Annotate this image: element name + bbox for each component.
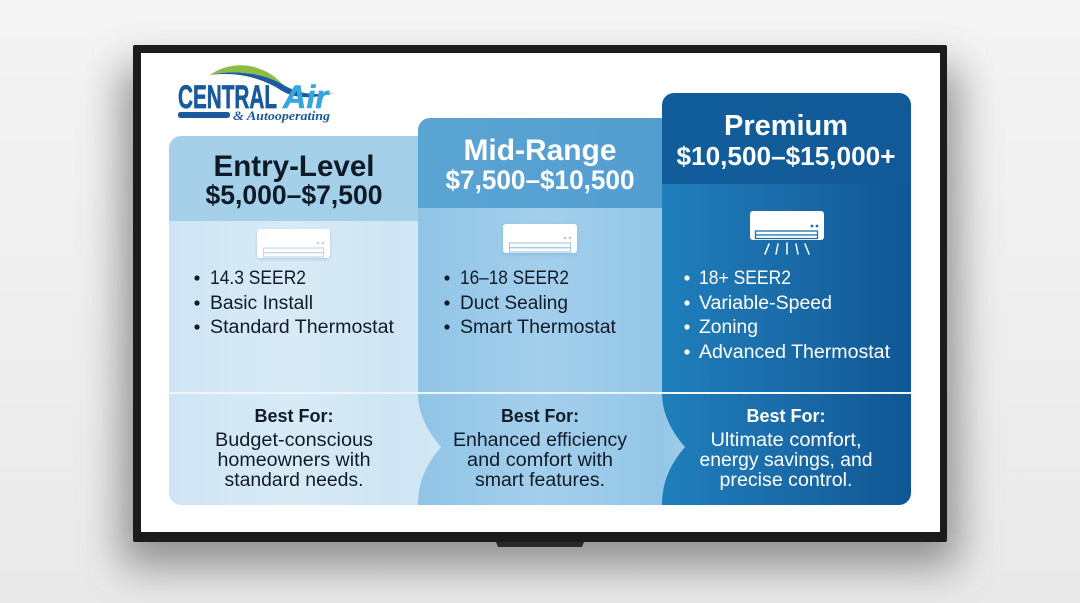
logo bar — [178, 112, 230, 118]
mid best for — [453, 406, 628, 491]
mid body — [418, 208, 690, 505]
premium title: Premium — [724, 110, 848, 142]
mid best for: Best For: — [501, 406, 579, 426]
icon: air conditioner — [257, 229, 330, 258]
logo: Central Air — [178, 65, 334, 123]
mid title: Mid-Range — [464, 134, 616, 167]
entry feature list: 14.3 SEER2 — [210, 268, 306, 289]
panel: premium — [662, 93, 911, 505]
panel: mid-range — [418, 118, 690, 505]
premium feature list: Zoning — [699, 317, 758, 338]
screen — [141, 53, 940, 532]
entry title: Entry-Level — [214, 150, 374, 183]
premium body — [662, 184, 911, 505]
premium best for: Ultimate comfort, — [710, 430, 862, 451]
logo tagline: & Autooperating — [233, 108, 331, 123]
mid price: $7,500–$10,500 — [446, 165, 634, 195]
entry best for: Best For: — [254, 406, 334, 426]
divider line — [169, 392, 911, 394]
premium feature list: 18+ SEER2 — [699, 268, 791, 289]
premium feature list: Variable-Speed — [699, 293, 832, 314]
panel: entry-level — [169, 136, 445, 505]
logo word Air: Air — [282, 79, 330, 115]
entry price: $5,000–$7,500 — [206, 180, 382, 210]
mid feature list: Duct Sealing — [460, 293, 568, 314]
mid best for: smart features. — [475, 470, 605, 491]
wall mount foot — [496, 542, 584, 547]
mid header — [418, 118, 664, 208]
mid feature list: Smart Thermostat — [460, 317, 617, 338]
premium best for: energy savings, and — [700, 450, 872, 471]
premium best for: precise control. — [720, 470, 852, 491]
television — [133, 45, 947, 547]
entry best for: standard needs. — [224, 470, 364, 491]
premium feature list: Advanced Thermostat — [699, 342, 891, 363]
icon: air conditioner with airflow — [750, 211, 824, 254]
mid feature list: 16–18 SEER2 — [460, 268, 569, 289]
premium best for: Best For: — [746, 406, 826, 426]
frame — [133, 45, 947, 542]
mid feature list — [444, 268, 617, 338]
icon: air conditioner — [503, 224, 577, 253]
premium feature list — [684, 268, 891, 363]
entry feature list: Basic Install — [210, 293, 313, 314]
logo word Central: CENTRAL — [178, 79, 277, 115]
entry body — [169, 221, 445, 505]
premium best for — [700, 406, 872, 491]
television shadow — [122, 68, 958, 566]
entry feature list — [194, 268, 395, 338]
entry header — [169, 136, 418, 221]
logo swoosh — [210, 65, 282, 84]
entry best for — [215, 406, 373, 491]
mid best for: Enhanced efficiency — [453, 430, 628, 451]
premium price: $10,500–$15,000+ — [676, 141, 896, 171]
entry best for: homeowners with — [218, 450, 370, 471]
mid best for: and comfort with — [467, 450, 613, 471]
entry best for: Budget-conscious — [215, 430, 373, 451]
entry feature list: Standard Thermostat — [210, 317, 395, 338]
premium header — [662, 93, 911, 184]
